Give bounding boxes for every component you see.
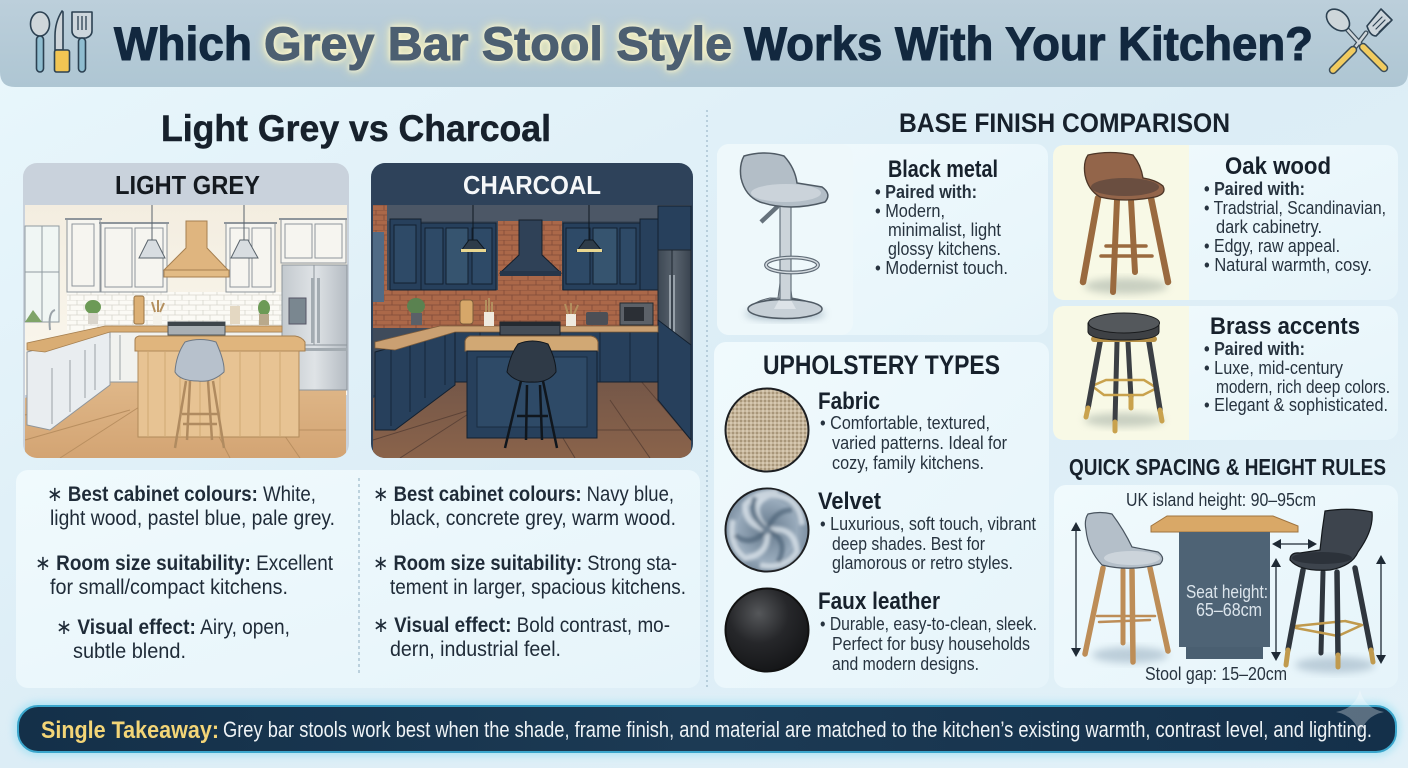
label: seat height: Seat height: [1186,581,1268,602]
text block: charcoal notes [373,483,686,661]
label: island height: UK island height: 90–95cm [1126,489,1316,510]
panel: light grey kitchen [23,163,349,458]
item: velvet: • Luxurious, soft touch, vibrant [820,513,1036,534]
item: faux leather [726,588,1037,674]
text block: charcoal notes: black, concrete grey, warm wood. [390,507,676,530]
label: LIGHT GREY: LIGHT GREY [115,170,260,200]
text: black metal details: • Modernist touch. [875,257,1008,278]
illustration: island [1151,516,1298,659]
text: oak wood details [1204,153,1386,275]
text: black metal details: Black metal [888,156,998,183]
panel: upholstery types [714,342,1049,688]
item: velvet: Velvet [818,488,881,515]
item: velvet: glamorous or retro styles. [832,552,1013,573]
item: faux leather: Perfect for busy households [832,633,1030,654]
divider [706,110,708,690]
text: black metal details [875,156,1008,278]
item: fabric: varied patterns. Ideal for [832,432,1007,453]
text: brass accents details: • Luxe, mid-century [1204,357,1344,378]
text: black metal details: minimalist, light [888,219,1001,240]
panel: spacing diagram [1054,485,1398,688]
header banner [0,0,1408,87]
title: Works With Your Kitchen? [744,17,1313,70]
text block: charcoal notes: ∗ Best cabinet colours: Navy blue, [373,483,674,506]
arrows: height and gap markers [1071,522,1386,664]
text block: light grey notes: light wood, pastel blue, pale grey. [50,507,335,530]
text block: light grey notes: ∗ Visual effect: Airy, open, [56,616,290,639]
item: velvet: deep shades. Best for [832,533,985,554]
text: oak wood details: Oak wood [1225,153,1331,180]
text block: light grey notes: ∗ Best cabinet colours: White, [47,483,316,506]
text block: light grey notes: ∗ Room size suitability: Excellent [35,552,333,575]
label: stool gap: Stool gap: 15–20cm [1145,663,1287,684]
heading: base finish comparison: BASE FINISH COMPARISON [899,108,1230,138]
text block: light grey notes [35,483,335,663]
title: Grey Bar Stool Style [264,17,732,70]
icon: chrome swivel stool [740,153,828,320]
icon: oak wood stool [1083,152,1168,294]
text: brass accents details: • Elegant & sophisticated. [1204,394,1388,415]
illustration: bright kitchen [25,205,347,458]
illustration: dark kitchen [373,205,691,458]
text block: charcoal notes: dern, industrial feel. [390,638,561,661]
item: faux leather: • Durable, easy-to-clean, sleek. [820,613,1037,634]
illustration: light grey stool [1085,512,1168,663]
item: faux leather: Faux leather [818,588,940,615]
heading: Light Grey vs Charcoal: Light Grey vs Charcoal [161,108,551,149]
text: oak wood details: • Paired with: [1204,178,1305,199]
card: brass accents [1053,306,1398,440]
icon: brass accent stool [1084,313,1164,431]
title [114,17,1313,70]
item: fabric: Fabric [818,388,880,415]
item: fabric: cozy, family kitchens. [832,452,984,473]
heading: upholstery types: UPHOLSTERY TYPES [763,350,1000,380]
icon: crossed spoon and spatula [1322,5,1392,70]
item: fabric: • Comfortable, textured, [820,412,990,433]
text: black metal details: • Modern, [875,200,945,221]
text: oak wood details: • Natural warmth, cosy. [1204,254,1372,275]
text block: charcoal notes: tement in larger, spacious kitchens. [390,576,686,599]
label: CHARCOAL: CHARCOAL [463,170,601,200]
text: brass accents details: • Paired with: [1204,338,1305,359]
icon: sparkle [1336,690,1384,736]
text block: light grey notes: for small/compact kitchens. [50,576,288,599]
text block: light grey notes: subtle blend. [73,640,186,663]
text: brass accents details [1204,313,1390,415]
text: brass accents details: Brass accents [1210,313,1360,340]
callout: single takeaway: Single Takeaway: [41,717,219,744]
card: oak wood [1053,145,1398,300]
text: oak wood details: • Edgy, raw appeal. [1204,235,1340,256]
label: seat height [1186,581,1268,620]
text block: charcoal notes: ∗ Visual effect: Bold contrast, mo- [373,614,670,637]
item: fabric [726,388,1007,473]
panel: charcoal kitchen [371,163,693,458]
title: Which [114,17,252,70]
callout: single takeaway [14,702,1400,756]
item: velvet [726,488,1036,573]
panel: shade comparison text [16,470,700,688]
text: oak wood details: dark cabinetry. [1216,216,1322,237]
text: black metal details: • Paired with: [875,181,977,202]
card: black metal [717,144,1048,335]
text: black metal details: glossy kitchens. [888,238,1001,259]
label: seat height: 65–68cm [1196,599,1262,620]
icon: spoon, knife and spatula [30,11,92,72]
text block: charcoal notes: ∗ Room size suitability: Strong sta- [373,552,677,575]
item: faux leather: and modern designs. [832,653,979,674]
illustration: charcoal stool [1286,509,1375,673]
